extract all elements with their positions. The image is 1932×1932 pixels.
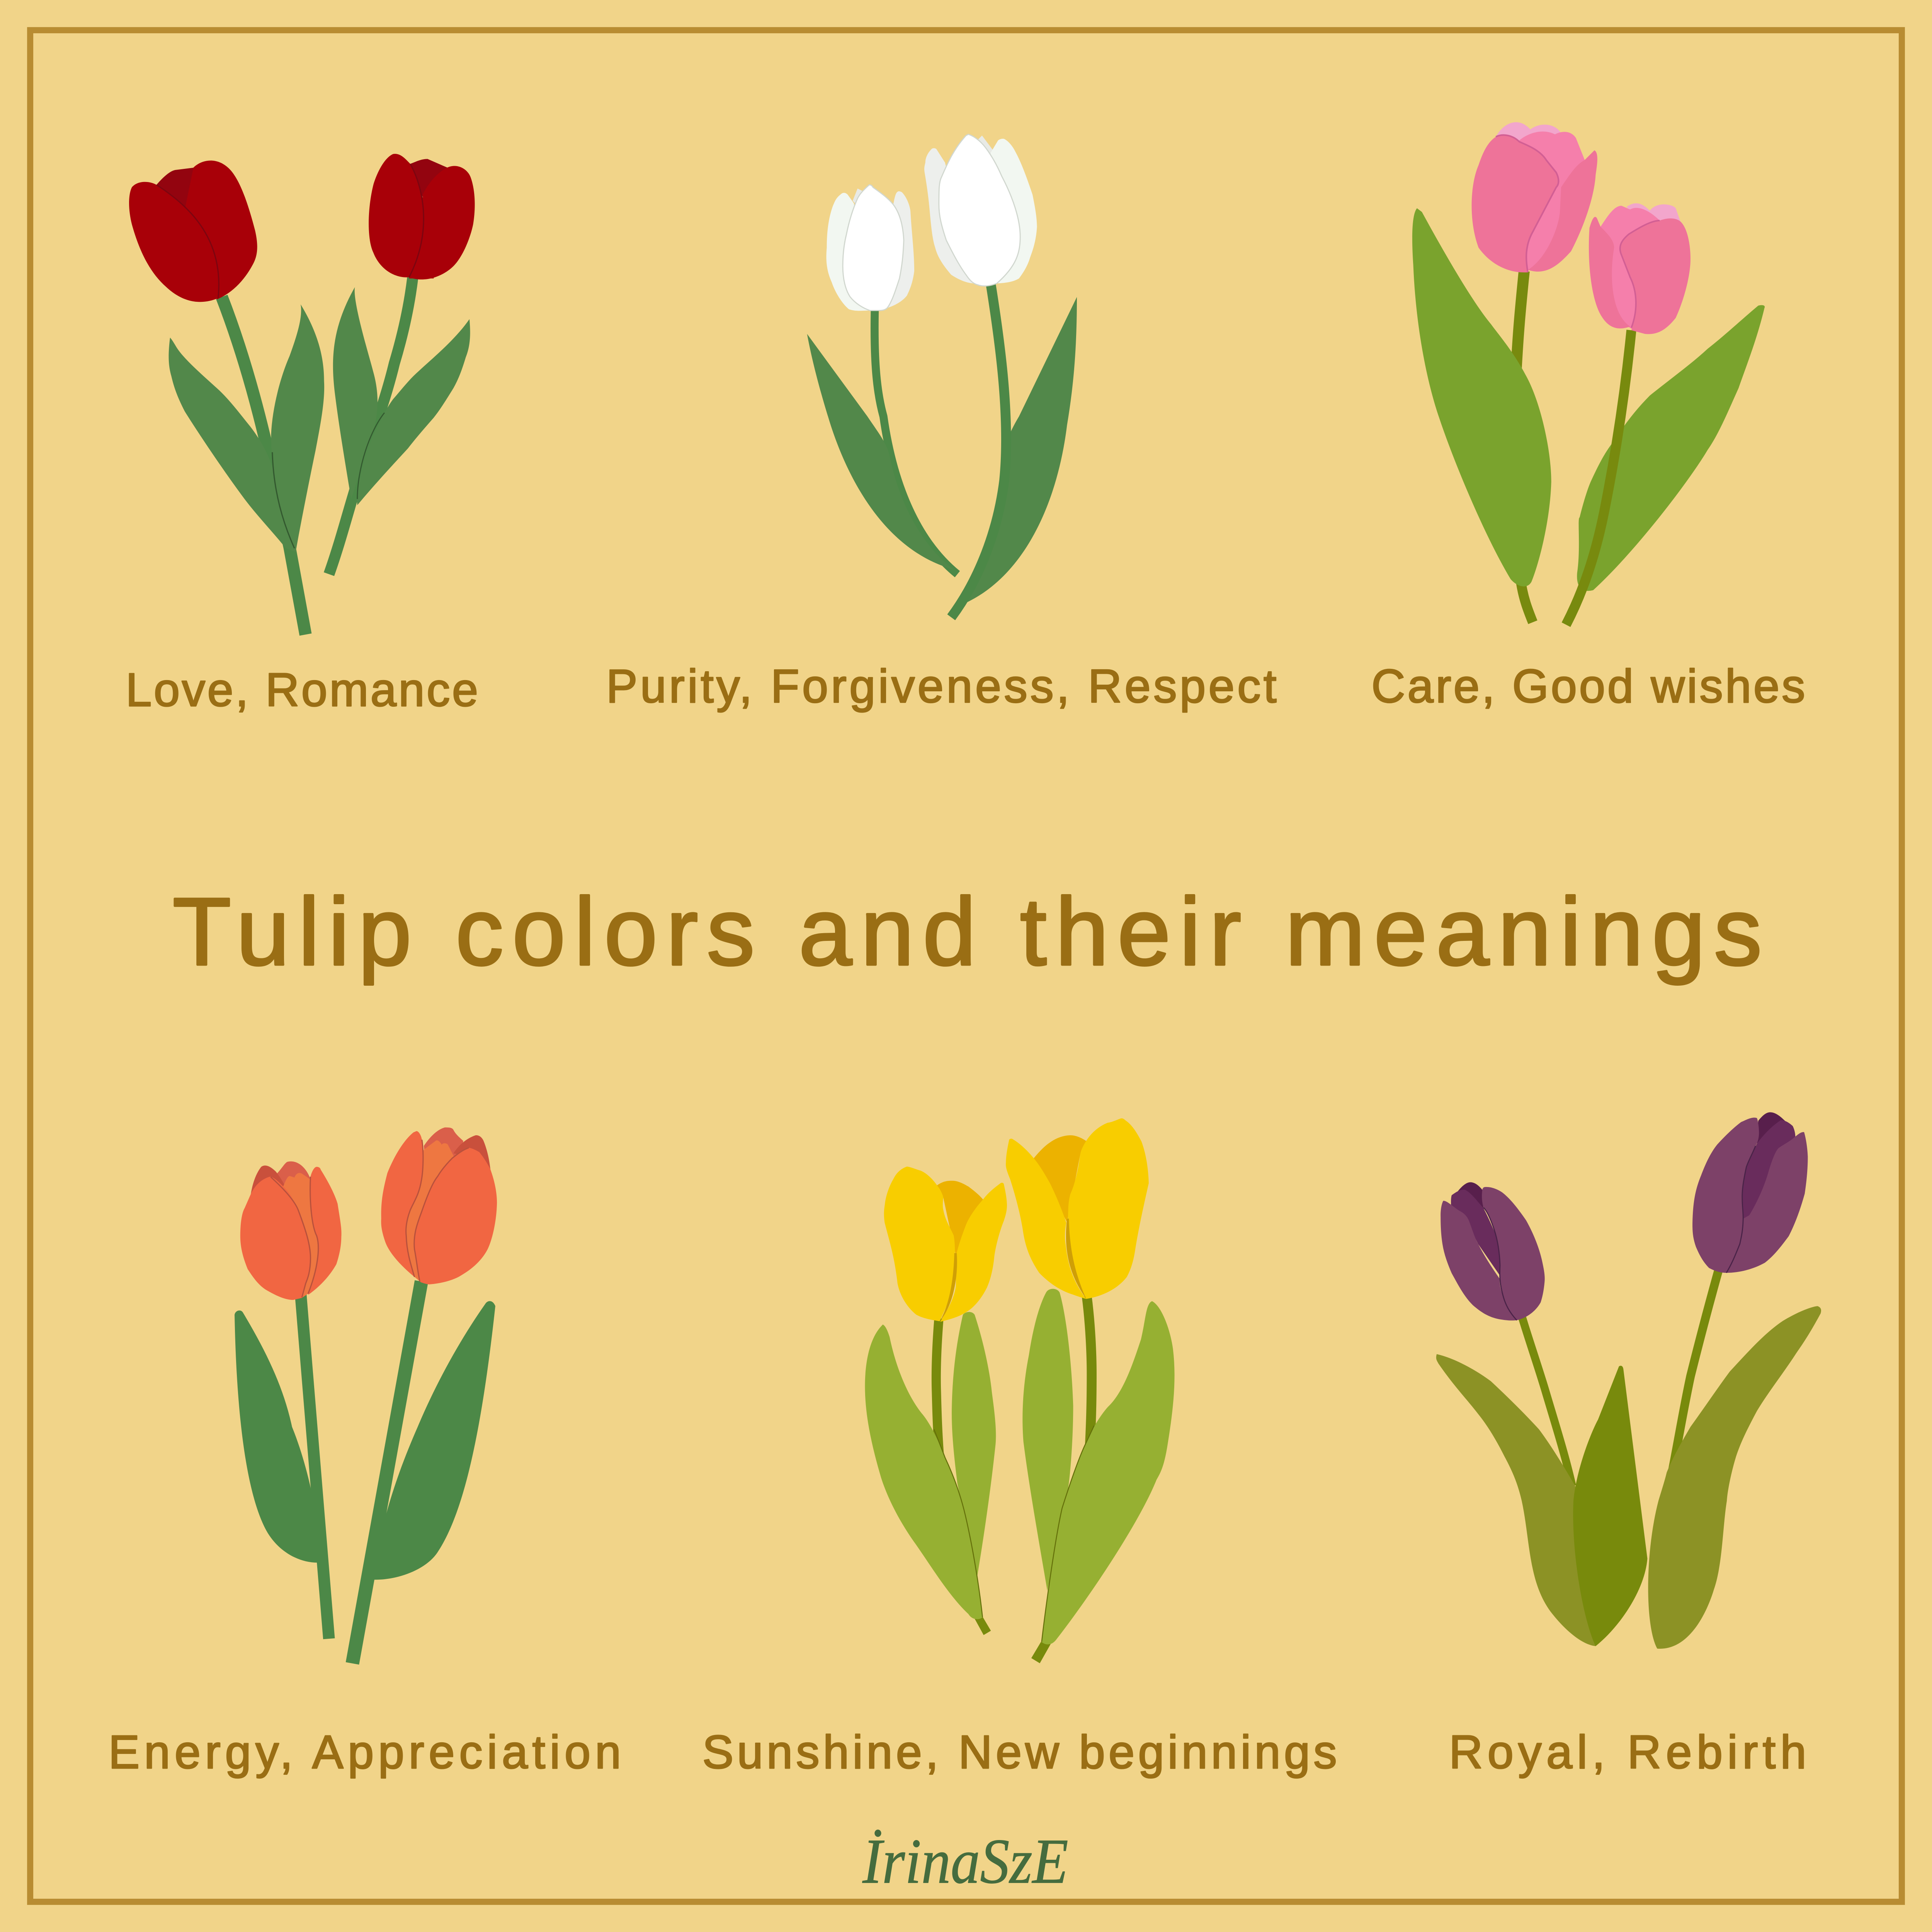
label: purple: Royal, Rebirth	[1449, 1726, 1806, 1778]
tulips: pink	[1412, 122, 1765, 625]
signature: İrinaSzE	[862, 1825, 1068, 1896]
tulips: purple	[1436, 1112, 1821, 1649]
tulips: orange	[235, 1128, 497, 1663]
label: yellow: Sunshine, New beginnings	[702, 1726, 1337, 1778]
tulips: red	[129, 154, 475, 634]
label: orange: Energy, Appreciation	[109, 1726, 621, 1778]
label: white: Purity, Forgiveness, Respect	[606, 660, 1277, 713]
tulips: white	[807, 134, 1077, 617]
tulips: yellow	[865, 1118, 1175, 1663]
title: Tulip colors and their meanings	[172, 878, 1762, 985]
label: pink: Care, Good wishes	[1371, 660, 1805, 713]
label: red: Love, Romance	[126, 663, 478, 716]
